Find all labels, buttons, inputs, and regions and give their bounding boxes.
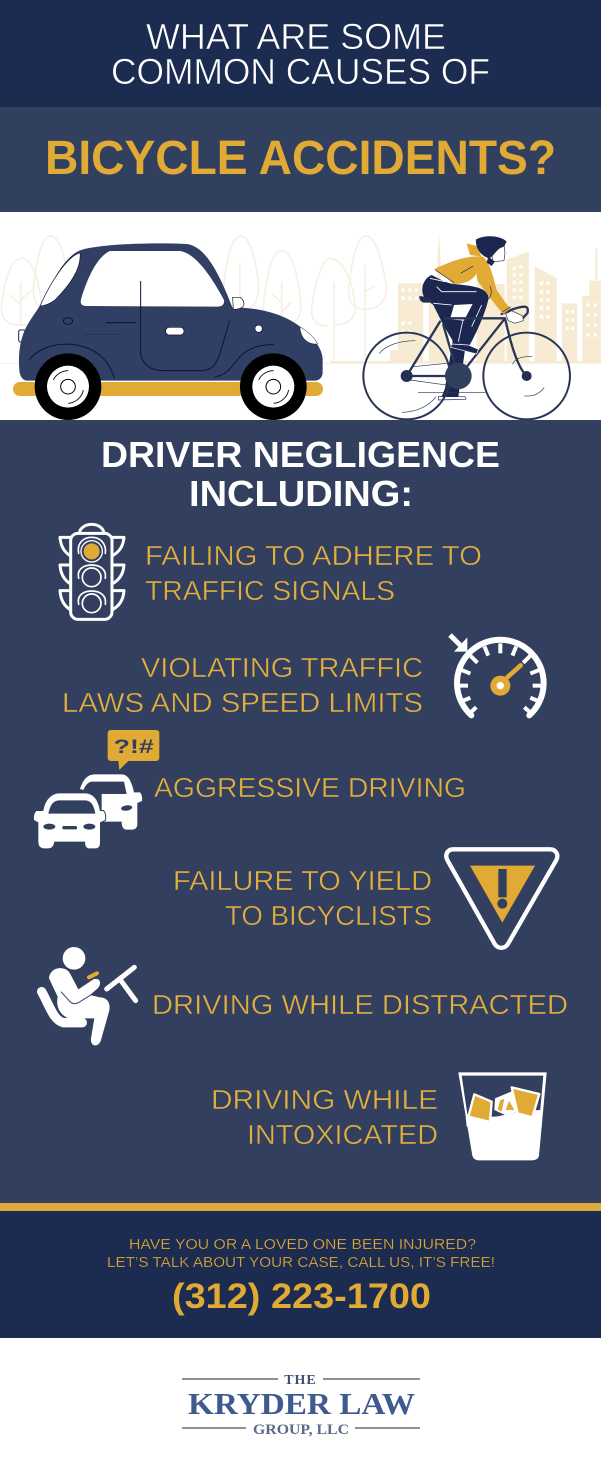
cyclist hand (506, 311, 523, 323)
logo: the kryder law group: KRYDER LAW (188, 1386, 415, 1421)
text: violating traffic laws: LAWS AND SPEED LIMITS (62, 687, 423, 718)
icon: speedometer (450, 635, 544, 715)
logo: the kryder law group: GROUP, LLC (253, 1422, 349, 1438)
panel: driver negligence (0, 420, 601, 1203)
text: violating traffic laws: VIOLATING TRAFFIC (141, 652, 423, 683)
illustration: city background (0, 236, 330, 363)
cyclist trousers (422, 275, 489, 347)
icon: whiskey glass (458, 1072, 547, 1160)
car mirror (233, 297, 244, 309)
illustration: road (13, 382, 323, 396)
subtitle heading: BICYCLE ACCIDENTS? (45, 132, 556, 185)
text: violating traffic laws (62, 652, 423, 718)
cyclist jacket (434, 256, 511, 314)
phone number: (312) 223-1700 (172, 1277, 431, 1316)
gold divider (0, 1203, 601, 1211)
panel: title top band (0, 0, 601, 107)
text: call to action: HAVE YOU OR A LOVED ONE BEEN INJURED? (129, 1237, 476, 1253)
cyclist shoe (451, 344, 478, 354)
text: driving while distracted: DRIVING WHILE DISTRACTED (152, 989, 568, 1020)
rear car (80, 774, 142, 830)
speech bubble: ?!# (114, 737, 154, 758)
front car (34, 793, 105, 848)
car rear window (40, 253, 80, 306)
panel: title highlight band (0, 107, 601, 212)
text: failing to adhere (145, 540, 482, 606)
text: failure to yield: FAILURE TO YIELD (173, 865, 432, 896)
logo: the kryder law group (182, 1373, 420, 1438)
text: failure to yield (173, 865, 432, 931)
title heading (111, 16, 490, 92)
car side window (81, 251, 224, 307)
bicycle (363, 307, 570, 419)
title heading: WHAT ARE SOME (146, 16, 446, 57)
title heading: COMMON CAUSES OF (111, 51, 490, 92)
illustration: skyline and trees (330, 232, 601, 364)
heading: driver negligence: DRIVER NEGLIGENCE (101, 434, 500, 475)
icon: angry traffic cars (34, 730, 159, 848)
text: driving while intoxicated: INTOXICATED (247, 1119, 438, 1150)
car details (29, 281, 274, 378)
car body (19, 243, 323, 381)
heading: driver negligence: INCLUDING: (189, 473, 413, 514)
cyclist lower leg (442, 337, 465, 397)
icon: yield warning sign (446, 849, 557, 948)
car bumper (19, 330, 25, 342)
icon: distracted driver (42, 947, 136, 1045)
car wheels (35, 353, 307, 420)
text: aggressive driving: AGGRESSIVE DRIVING (154, 772, 466, 803)
text: failing to adhere: TRAFFIC SIGNALS (145, 575, 395, 606)
text: driving while intoxicated: DRIVING WHILE (211, 1084, 438, 1115)
panel: call to action (0, 1211, 601, 1338)
logo: the kryder law group: THE (284, 1373, 317, 1388)
text: failure to yield: TO BICYCLISTS (225, 900, 432, 931)
text: call to action: LET’S TALK ABOUT YOUR CASE, CALL US, IT’S FREE! (107, 1255, 495, 1271)
text: call to action (107, 1237, 495, 1271)
illustration: cyclist on bicycle (363, 236, 570, 419)
text: failing to adhere: FAILING TO ADHERE TO (145, 540, 482, 571)
heading: driver negligence (101, 434, 500, 514)
cyclist face and hair (490, 243, 505, 262)
text: driving while intoxicated (211, 1084, 438, 1150)
icon: traffic light (60, 524, 124, 619)
illustration: car (19, 243, 323, 420)
